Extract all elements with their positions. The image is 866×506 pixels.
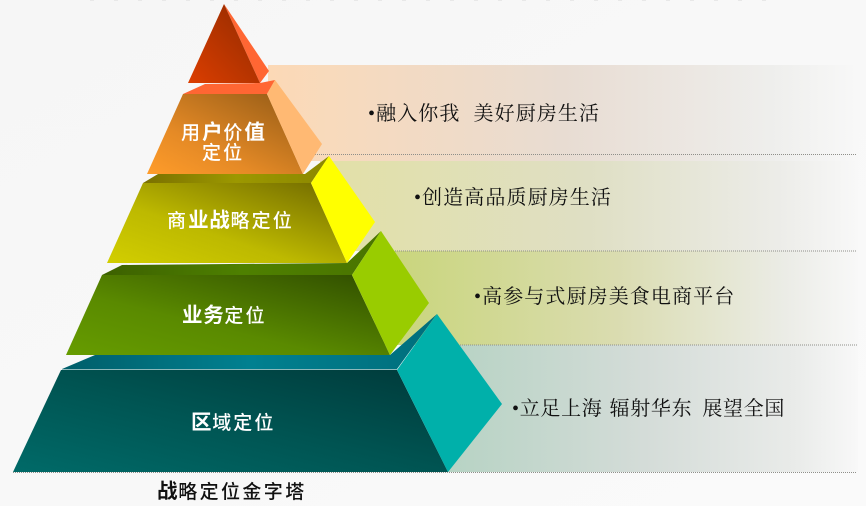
- text: row 1 description: •融入你我 美好厨房生活: [368, 102, 600, 125]
- row band: user value: [268, 65, 858, 161]
- tier: apex: [188, 4, 269, 83]
- text: row 3 description: •高参与式厨房美食电商平台: [474, 285, 735, 308]
- tier: business positioning: 业务定位: [182, 304, 267, 327]
- row band: regional: [430, 345, 858, 472]
- tier: user value positioning: 定位: [202, 142, 244, 164]
- tier: business strategy positioning: [107, 156, 375, 263]
- pyramid: [13, 4, 502, 472]
- tier: business strategy positioning: 商业战略定位: [167, 209, 294, 232]
- text: row 2 description: •创造高品质厨房生活: [414, 186, 612, 209]
- panel: description rows: [13, 65, 858, 472]
- tier: user value positioning: [147, 80, 322, 174]
- row band: business strategy: [320, 161, 858, 251]
- row band: business: [375, 251, 858, 345]
- tier: regional positioning: [13, 314, 502, 472]
- text: row 4 description: •立足上海 辐射华东 展望全国: [512, 397, 785, 420]
- tier: user value positioning: 用户价值: [181, 120, 266, 144]
- tier: business positioning: [66, 231, 429, 355]
- caption: pyramid title: 战略定位金字塔: [157, 480, 307, 503]
- tier: regional positioning: 区域定位: [191, 411, 276, 434]
